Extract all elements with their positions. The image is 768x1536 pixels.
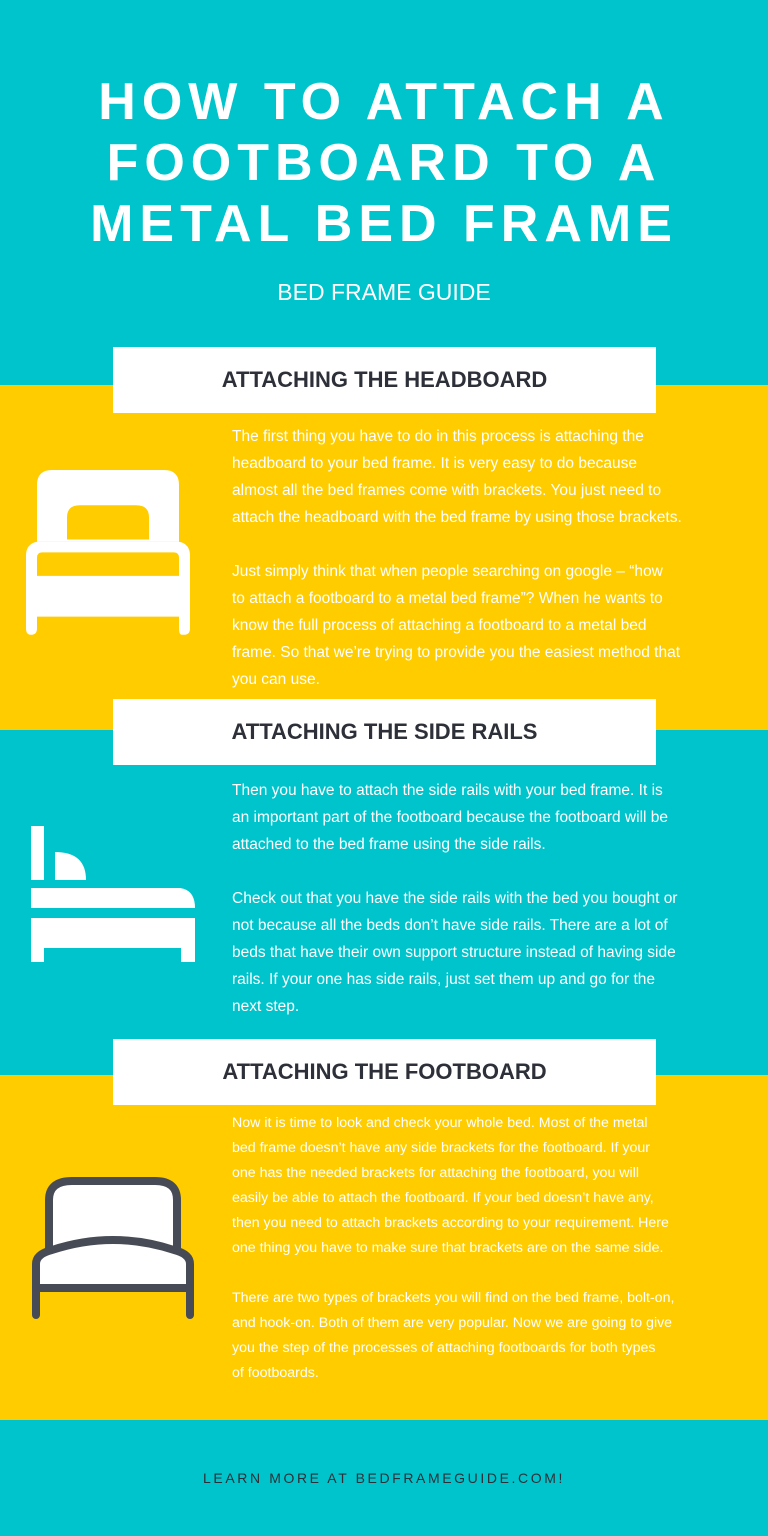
text: footboard: one thing you have to make sure that brackets are on the same side. [232,1240,663,1256]
text: side rails: an important part of the footboard because the footboard will be [232,809,668,826]
text: side rails: next step. [232,998,299,1015]
text: headboard [232,428,682,688]
heading: attaching the footboard [113,1039,656,1105]
footer: LEARN MORE AT BEDFRAMEGUIDE.COM! [203,1470,565,1486]
text: side rails: attached to the bed frame using the side rails. [232,836,546,853]
title: HOW TO ATTACH A [98,73,670,131]
icon: bed white [26,470,190,635]
text: headboard: frame. So that we’re trying to provide you the easiest method that [232,644,680,661]
title [90,73,678,253]
text: footboard: Now it is time to look and check your whole bed. Most of the metal [232,1115,648,1131]
text: side rails: not because all the beds don’t have side rails. There are a lot of [232,917,668,934]
text: headboard: headboard to your bed frame. It is very easy to do because [232,455,637,472]
text: footboard [232,1115,674,1381]
heading: attaching the side rails [113,699,656,765]
text: headboard: The first thing you have to do in this process is attaching the [232,428,644,445]
heading: attaching the footboard: ATTACHING THE FOOTBOARD [222,1059,547,1084]
heading: attaching the headboard: ATTACHING THE HEADBOARD [222,367,547,392]
title: METAL BED FRAME [90,195,678,253]
text: headboard: attach the headboard with the bed frame by using those brackets. [232,509,682,526]
text: footboard: and hook-on. Both of them are very popular. Now we are going to give [232,1315,672,1331]
heading: attaching the headboard [113,347,656,413]
heading: attaching the side rails: ATTACHING THE SIDE RAILS [232,719,537,744]
text: footboard: of footboards. [232,1365,319,1381]
text: footboard: you the step of the processes of attaching footboards for both types [232,1340,656,1356]
text: headboard: almost all the bed frames come with brackets. You just need to [232,482,661,499]
text: side rails: Then you have to attach the side rails with your bed frame. It is [232,782,663,799]
subtitle: BED FRAME GUIDE [277,279,491,305]
text: side rails [232,782,678,1015]
text: footboard: one has the needed brackets for attaching the footboard, you will [232,1165,639,1181]
text: footboard: bed frame doesn’t have any side brackets for the footboard. If your [232,1140,650,1156]
text: headboard: know the full process of attaching a footboard to a metal bed [232,617,646,634]
text: side rails: Check out that you have the side rails with the bed you bought or [232,890,677,907]
text: side rails: rails. If your one has side rails, just set them up and go for the [232,971,655,988]
text: footboard: then you need to attach brackets according to your requirement. Here [232,1215,669,1231]
text: footboard: There are two types of brackets you will find on the bed frame, bolt-on, [232,1290,674,1306]
title: FOOTBOARD TO A [107,134,661,192]
text: side rails: beds that have their own support structure instead of having side [232,944,676,961]
icon: bed outline [32,1177,194,1319]
text: headboard: to attach a footboard to a metal bed frame”? When he wants to [232,590,663,607]
text: footboard: easily be able to attach the footboard. If your bed doesn’t have any, [232,1190,654,1206]
text: headboard: Just simply think that when people searching on google – “how [232,563,663,580]
icon: bed side view [31,826,195,962]
text: headboard: you can use. [232,671,320,688]
